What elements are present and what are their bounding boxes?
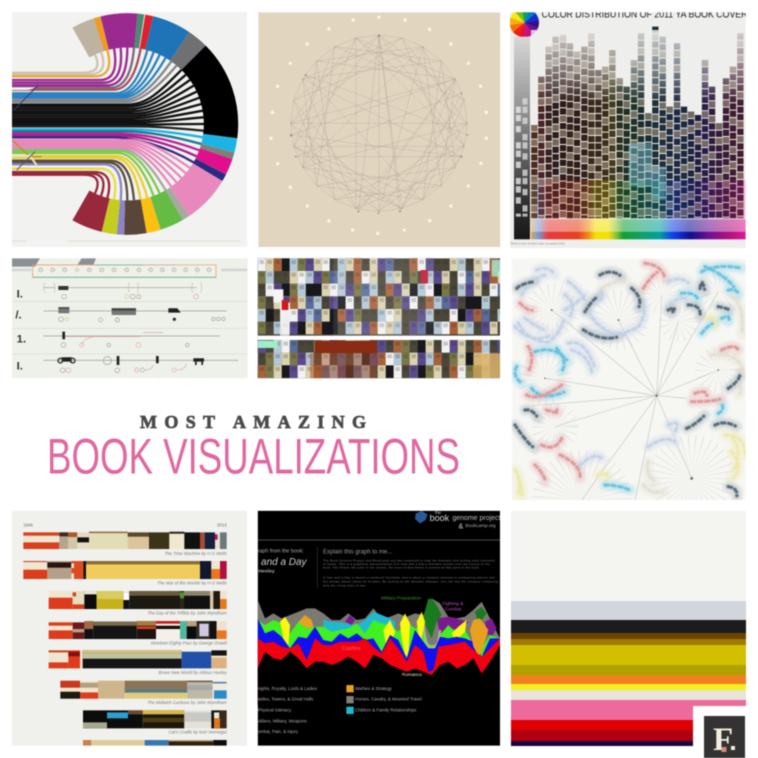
book heading: raph from the book:	[258, 549, 304, 555]
legend right	[346, 685, 422, 714]
row 4 timeline	[43, 356, 238, 373]
caption: The Time Machine by H G Wells	[164, 551, 227, 556]
bar: brave new world	[49, 650, 227, 668]
row 3 timeline	[43, 332, 220, 347]
small crossings at left edge	[12, 85, 42, 170]
legend frame	[33, 265, 216, 277]
grayscale covers	[518, 98, 525, 217]
mosaic hue wash	[531, 180, 746, 219]
row numerals: 1.	[17, 334, 26, 346]
stream labels: Romance	[402, 672, 422, 677]
bar: partially cropped book	[83, 740, 227, 746]
caption: Cat's Cradle by Kurt Vonnegut	[168, 730, 227, 735]
panel: radial tree of clusters	[511, 258, 746, 500]
network chords	[291, 35, 468, 212]
fan outer ring segments	[0, 0, 260, 256]
main branches	[532, 292, 718, 500]
years: 1946	[23, 522, 34, 527]
panel: mosaic of book covers	[256, 257, 501, 379]
caption: The Day of the Triffids by John Wyndham	[147, 611, 227, 616]
white notch behind logo	[693, 706, 758, 758]
network node dots	[290, 34, 468, 214]
legend left: ombat, Pain, & Injury	[258, 729, 299, 734]
explanation text	[323, 550, 498, 588]
row dividers	[12, 302, 248, 354]
grayscale column	[514, 37, 530, 239]
mosaic column bases	[534, 27, 740, 218]
panel: network circle on beige	[258, 12, 501, 248]
panel: horizontal color bands	[511, 511, 746, 746]
spectrum strip	[531, 219, 746, 239]
stream labels: Combat	[445, 606, 462, 611]
caption: The Midwich Cuckoos by John Wyndham	[147, 700, 227, 705]
mosaic top fade	[531, 30, 746, 103]
cover inner detail	[259, 262, 500, 369]
caption: Nineteen Eighty-Four by George Orwell	[151, 640, 228, 645]
book heading: and a Day	[261, 557, 308, 568]
stream labels	[342, 596, 464, 677]
legend right: Horses, Cavalry, & Mounted Travel	[355, 697, 422, 702]
bar: the war of the worlds	[23, 561, 227, 579]
panel: circular fan diagram	[11, 12, 247, 247]
icon: F logo: F	[713, 722, 733, 758]
outer ring of white dots	[269, 16, 488, 235]
header: project logo: the	[435, 510, 442, 515]
mosaic cells	[258, 265, 500, 372]
cluster dots	[515, 263, 745, 498]
header: project logo: BookLamp.org	[465, 523, 496, 528]
bar: the midwich cuckoos	[60, 681, 227, 699]
header: project logo: genome project	[452, 515, 501, 522]
heading: most amazing: MOST AMAZING	[140, 412, 366, 432]
book heading: Henley	[258, 569, 275, 575]
header: project logo: &	[458, 521, 463, 530]
heading: book visualizations: BOOK VISUALIZATIONS	[47, 428, 460, 484]
caption: Brave New World by Aldous Huxley	[159, 670, 227, 675]
explanation text: A Year and a Day is based in medieval Scotland, and is about a romance between a conquering warrior and	[323, 575, 495, 579]
years	[23, 522, 227, 527]
icon: F logo	[704, 716, 745, 758]
stream labels: Castles	[342, 646, 361, 652]
header: project logo	[415, 510, 501, 530]
bar: nineteen eighty-four	[49, 621, 227, 639]
row numerals: I.	[17, 360, 23, 372]
explanation text: The Book Genome Project and BookLamp.org has computed to map the thematic and writing style elements	[323, 559, 495, 563]
explanation text: of books. This is a graphical representation of A Year and a Day's thematic stream over the course of the	[323, 562, 490, 566]
panel: book genome streamgraph	[256, 510, 501, 746]
mosaic lighter covers	[534, 33, 740, 218]
legend left: nights, Royalty, Lords & Ladies	[258, 686, 317, 691]
bar: the day of the triffids	[49, 591, 227, 609]
hub nodes	[544, 309, 719, 480]
explanation text: with the rising tides of war.	[323, 584, 367, 588]
white gap between mosaic strips	[258, 336, 500, 340]
row numerals: /.	[15, 309, 22, 321]
caption: Book Cover Archive data, compiled 2011	[511, 241, 565, 245]
fan stripes flowing to the left	[12, 47, 204, 201]
explanation text: Explain this graph to me...	[323, 550, 393, 556]
mosaic accent blocks	[258, 258, 500, 378]
bar: cat's cradle	[83, 710, 227, 728]
row numerals: I.	[17, 288, 23, 300]
panel: novels timeline bars	[12, 511, 247, 746]
top gray shapes	[12, 258, 96, 267]
caption: The War of the Worlds by H G Wells	[157, 580, 227, 585]
legend right: Warfare & Strategy	[355, 686, 392, 691]
legend left	[258, 686, 317, 734]
legend left: oldiers, Military, Weapons	[258, 718, 307, 723]
mosaic cyan highlight block	[628, 143, 665, 200]
cluster spokes	[532, 282, 730, 525]
stream labels: Fighting &	[442, 601, 464, 606]
streamgraph	[258, 598, 500, 705]
explanation text: the woman whose castle he invades. By looking at the thematic changes, you can see the romance competing	[323, 579, 498, 583]
panel: book timeline diagram	[11, 258, 248, 378]
legend left: astles, Towers, & Great Halls	[258, 697, 313, 702]
row numerals	[15, 288, 26, 372]
years: 2013	[217, 522, 227, 527]
legend right: Children & Family Relationships	[355, 708, 416, 713]
bar: the time machine	[23, 532, 227, 549]
legend left: Physical Intimacy	[258, 708, 292, 713]
book heading	[258, 549, 308, 575]
row 2 timeline	[43, 307, 227, 322]
stream labels: Military Preparation	[381, 596, 422, 601]
legend circles	[39, 268, 211, 272]
header: project logo: book	[430, 513, 450, 523]
row 1 timeline	[43, 283, 202, 299]
legend dashed ends	[12, 266, 248, 274]
explanation text: book. The thicker the color in the stream, the more of that theme is present at that point in the book.	[323, 565, 480, 569]
panel: color distribution of book covers	[509, 10, 753, 248]
cluster soft halos	[515, 263, 745, 498]
color wheel	[514, 12, 535, 33]
